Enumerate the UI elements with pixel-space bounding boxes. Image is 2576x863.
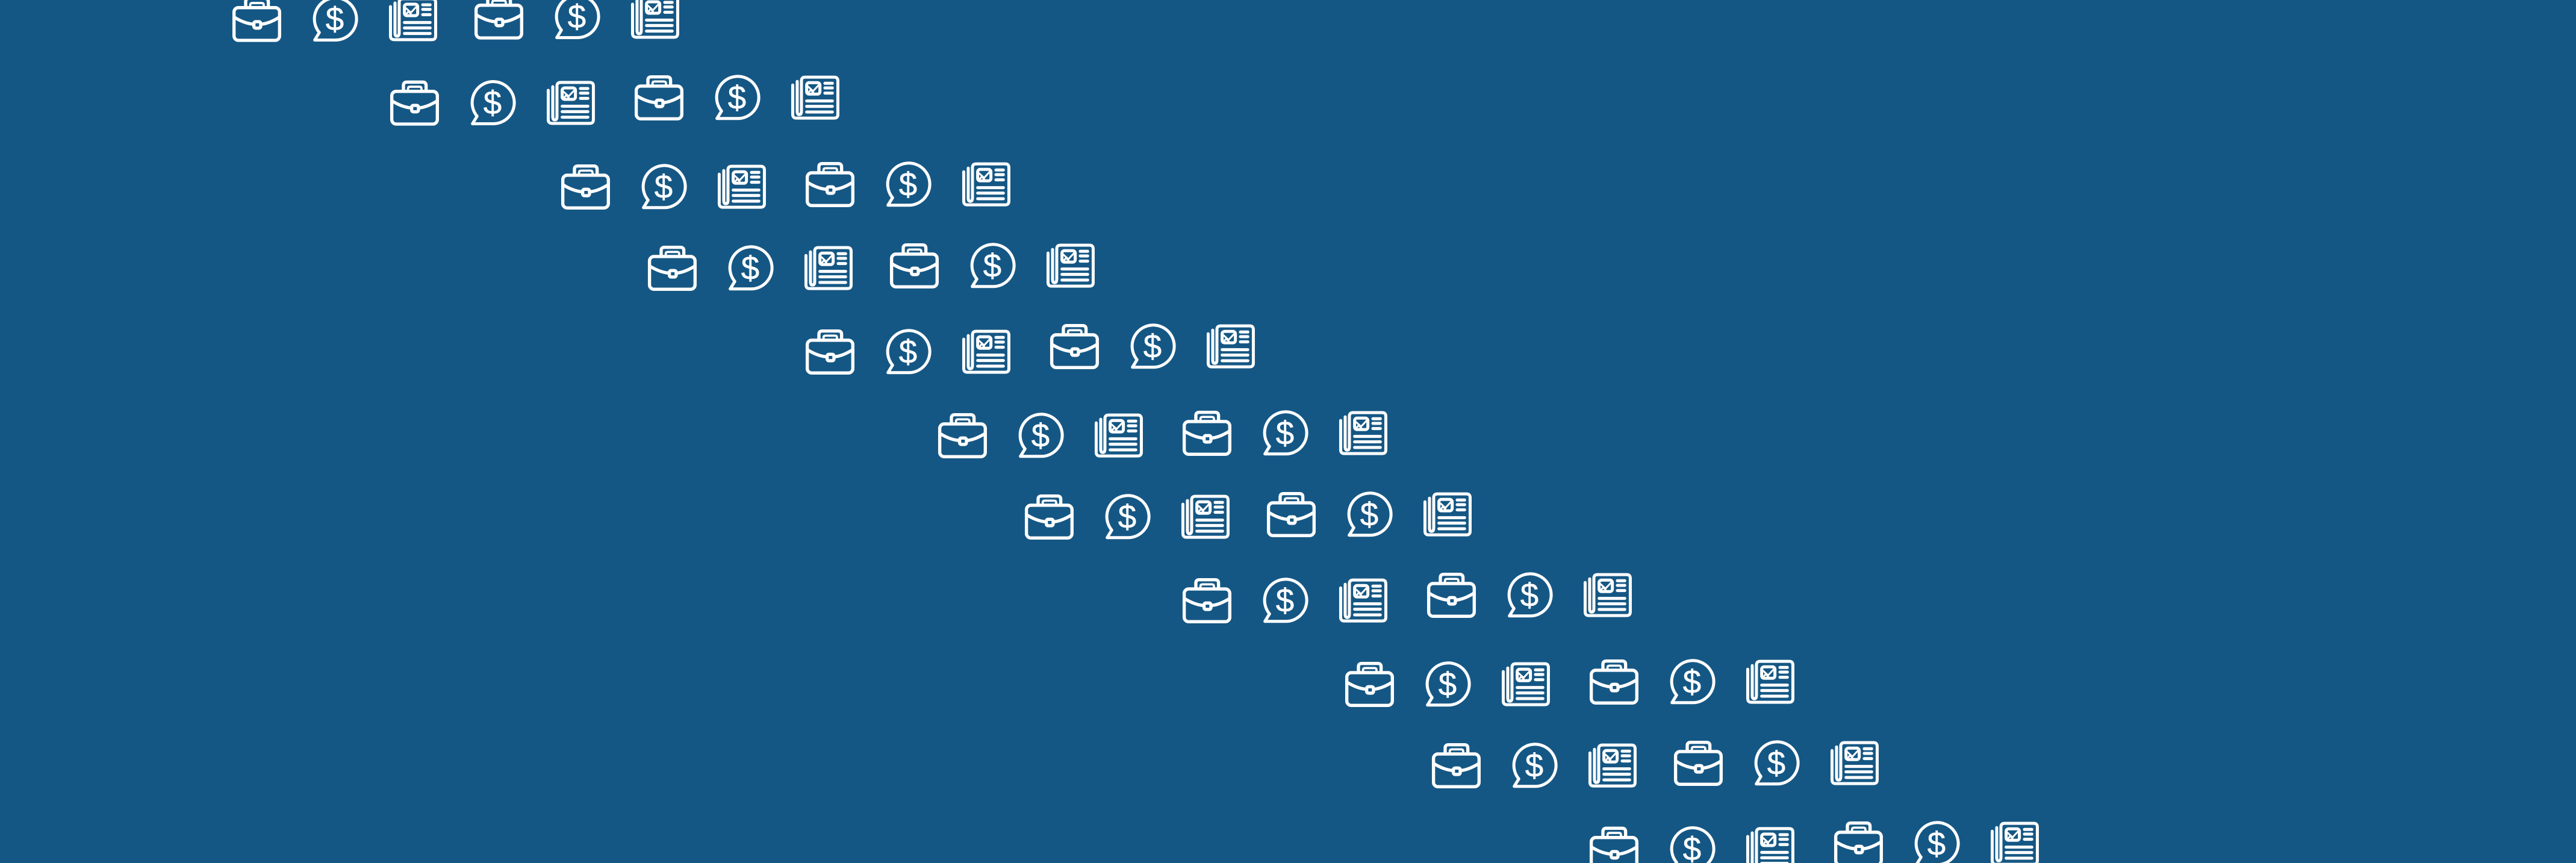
row 5 icons	[807, 325, 1253, 373]
icon: dollar speech bubble: $	[1143, 328, 1162, 365]
icon: dollar speech bubble: $	[728, 79, 746, 116]
icon: briefcase	[650, 248, 695, 289]
icon: briefcase	[1027, 496, 1072, 538]
icon: briefcase	[807, 164, 853, 205]
icon set 1	[234, 0, 435, 40]
icon: newspaper	[1208, 326, 1253, 367]
icon: newspaper	[1590, 745, 1635, 786]
icon: dollar speech bubble	[556, 0, 599, 37]
icon: dollar speech bubble: $	[983, 248, 1001, 284]
icon: dollar speech bubble	[1756, 742, 1798, 784]
row 7 icons	[1027, 493, 1470, 538]
icon: briefcase	[1347, 664, 1392, 705]
icon: briefcase	[476, 0, 521, 38]
icon: newspaper	[1747, 829, 1793, 863]
icon: briefcase	[1184, 413, 1230, 454]
icon: newspaper	[1585, 575, 1630, 615]
icon: dollar speech bubble: $	[899, 334, 917, 370]
row 4 icons	[650, 245, 1093, 289]
icon: newspaper	[1425, 494, 1470, 535]
icon: dollar speech bubble	[1916, 823, 1958, 863]
icon: briefcase	[392, 82, 437, 124]
icon set 1	[1591, 828, 1793, 863]
icon: dollar speech bubble: $	[1683, 664, 1701, 700]
icon: briefcase	[563, 166, 608, 208]
icon: briefcase	[1184, 580, 1230, 622]
icon: briefcase	[1052, 326, 1097, 367]
icon: briefcase	[1429, 575, 1474, 616]
icon: newspaper	[963, 331, 1009, 372]
icon: dollar speech bubble: $	[655, 169, 673, 205]
icon set 2	[892, 245, 1093, 287]
icon: dollar speech bubble	[1265, 579, 1307, 622]
icon: dollar speech bubble	[1132, 325, 1174, 367]
icon: briefcase	[892, 245, 937, 287]
icon: newspaper	[792, 77, 838, 118]
icon: dollar speech bubble: $	[1927, 826, 1946, 862]
icon set 1	[1027, 496, 1228, 538]
icon: dollar speech bubble	[1672, 828, 1714, 863]
icon set 1	[650, 247, 851, 289]
icon set 1	[1184, 579, 1386, 622]
row 9 icons	[1347, 661, 1793, 705]
icon set 1	[940, 414, 1141, 456]
icon: dollar speech bubble: $	[899, 166, 917, 203]
icon set 2	[807, 163, 1009, 205]
icon: dollar speech bubble: $	[1439, 666, 1457, 703]
row 10 icons	[1434, 742, 1877, 787]
icon: dollar speech bubble	[1107, 496, 1149, 538]
icon: dollar speech bubble	[717, 76, 759, 119]
icon: newspaper	[1340, 580, 1386, 621]
icon: dollar speech bubble: $	[1767, 745, 1785, 782]
row 3 icons	[563, 163, 1009, 208]
icon: dollar speech bubble: $	[741, 250, 759, 287]
icon: dollar speech bubble	[972, 245, 1014, 287]
row 6 icons	[940, 412, 1386, 456]
icon: briefcase	[1434, 745, 1479, 787]
icon: dollar speech bubble	[1349, 493, 1391, 535]
icon: dollar speech bubble	[1672, 661, 1714, 703]
icon: dollar speech bubble	[314, 0, 356, 40]
icon: newspaper	[1992, 823, 2037, 863]
icon: dollar speech bubble	[1020, 414, 1062, 456]
icon: newspaper	[632, 0, 677, 37]
icon: dollar speech bubble	[888, 163, 930, 205]
icon set 1	[392, 82, 593, 124]
icon: newspaper	[1183, 496, 1228, 537]
icon set 2	[636, 76, 838, 119]
icon set 2	[1269, 493, 1470, 535]
icon: briefcase	[807, 331, 853, 373]
icon: dollar speech bubble	[472, 82, 514, 123]
icon set 2	[1676, 742, 1877, 784]
icon: newspaper	[719, 166, 764, 207]
icon: newspaper	[548, 83, 593, 123]
icon: dollar speech bubble	[1265, 412, 1307, 454]
icon: dollar speech bubble	[1427, 663, 1469, 705]
icon set 1	[1434, 744, 1635, 787]
icon set 2	[1429, 574, 1630, 616]
icon: dollar speech bubble: $	[1360, 496, 1378, 533]
icon: newspaper	[390, 0, 435, 40]
icon: dollar speech bubble: $	[1031, 417, 1050, 454]
icon: newspaper	[1096, 415, 1141, 456]
row 2 icons	[392, 76, 838, 124]
icon: dollar speech bubble: $	[326, 1, 344, 38]
icon: dollar speech bubble: $	[1118, 499, 1136, 535]
row 11 icons	[1591, 823, 2037, 863]
icon: briefcase	[940, 415, 985, 456]
icon: dollar speech bubble: $	[1276, 582, 1294, 619]
icon: newspaper	[1340, 413, 1386, 453]
icon: briefcase	[1591, 661, 1637, 703]
icon: newspaper	[1832, 743, 1877, 784]
icon: newspaper	[806, 248, 851, 288]
icon: briefcase	[1269, 494, 1314, 535]
icon set 2	[1184, 412, 1386, 454]
icon: newspaper	[963, 164, 1009, 205]
icon: briefcase	[1676, 743, 1721, 784]
icon: dollar speech bubble	[888, 331, 930, 373]
row 8 icons	[1184, 574, 1630, 622]
icon: dollar speech bubble	[730, 247, 772, 289]
icon: briefcase	[636, 77, 682, 119]
icon set 2	[1591, 661, 1793, 703]
row 1 icons	[234, 0, 677, 40]
icon: newspaper	[1747, 661, 1793, 702]
icon: newspaper	[1048, 245, 1093, 286]
icon: dollar speech bubble: $	[1520, 577, 1538, 614]
icon: dollar speech bubble	[643, 166, 685, 208]
icon set 1	[1347, 663, 1548, 705]
icon: dollar speech bubble: $	[1525, 747, 1543, 784]
icon set 1	[563, 166, 764, 208]
icon set 2	[1052, 325, 1253, 367]
icon: briefcase	[234, 0, 279, 40]
icon set 2	[1836, 823, 2037, 863]
icon: briefcase	[1836, 823, 1881, 863]
icon: dollar speech bubble	[1514, 744, 1556, 787]
icon: dollar speech bubble	[1509, 574, 1551, 616]
icon set 1	[807, 331, 1009, 373]
icon: dollar speech bubble: $	[1276, 415, 1294, 452]
icon: dollar speech bubble: $	[484, 85, 502, 122]
icon: briefcase	[1591, 828, 1637, 863]
icon: newspaper	[1503, 664, 1548, 705]
icon set 2	[476, 0, 677, 38]
